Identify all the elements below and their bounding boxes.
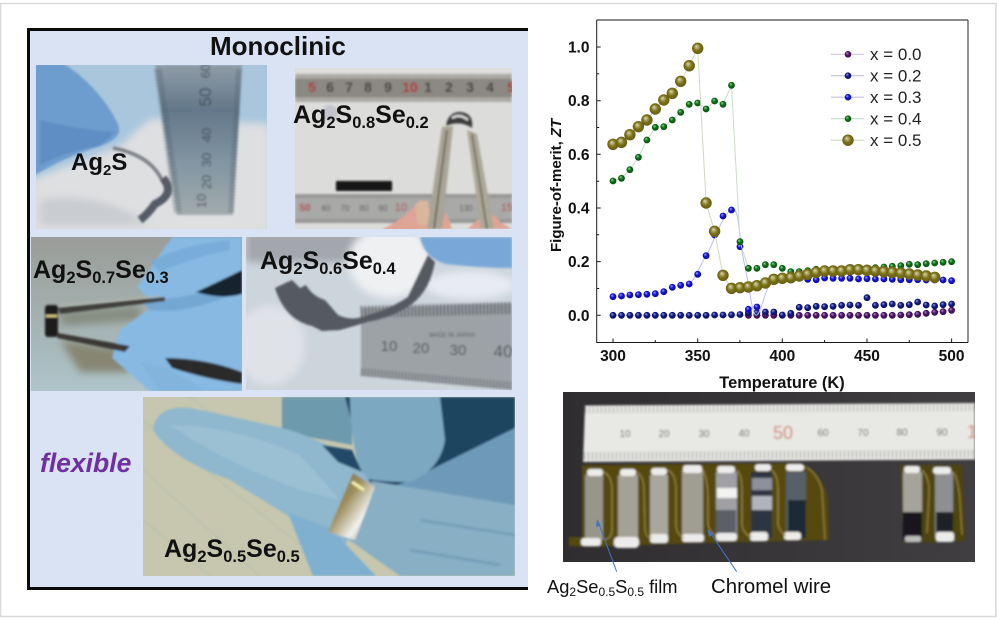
y axis title: Figure-of-merit, ZT [548,117,565,252]
chart: figure of merit ZT vs temperature [548,20,968,392]
legend: x = 0.4 [870,110,922,128]
photo: Ag2S0.8Se0.2 with tweezers: 10 [402,79,418,95]
callout: Chromel wire: Chromel wire [711,576,831,598]
photo: Ag2S0.8Se0.2 with tweezers: 3 [466,79,474,95]
callout: Ag2Se0.5S0.5 film: 2 [569,585,576,599]
callout: Ag2Se0.5S0.5 film: 0.5 [598,585,615,599]
label: Ag2S0.5Se0.5: 2 [197,548,207,566]
photo: Ag2S0.8Se0.2 with tweezers: 70 [341,204,350,213]
label: Ag2S0.5Se0.5: 0.5 [223,548,246,566]
ruler: 40 [738,428,750,440]
photo: Ag2S0.8Se0.2 with tweezers: 10 [395,202,407,214]
x axis tick labels: 500 [939,348,965,365]
label: Ag2S0.8Se0.2: Ag [293,101,326,129]
photo: Ag2S0.8Se0.2 with tweezers: 5 [507,79,515,95]
photo: Ag2S film against ruler: 50 [196,88,215,106]
y axis tick labels: 1.0 [568,40,590,56]
photo: Ag2S0.8Se0.2 with tweezers: 5 [308,79,316,95]
x axis tick labels: 350 [685,348,711,365]
label: flexible: flexible [40,448,131,478]
label: Ag2S0.8Se0.2: Se [375,101,406,129]
x axis title: Temperature (K) [719,374,845,392]
label: Ag2S0.6Se0.4: 2 [293,260,303,278]
y axis tick labels: 0.4 [568,200,590,218]
photo: Ag2S0.8Se0.2 with tweezers: 130 [459,204,473,213]
photo: Ag2S0.8Se0.2 with tweezers: 15 [501,202,513,214]
label: Ag2S0.7Se0.3: Ag [33,256,66,284]
y axis tick labels: 0.8 [568,93,590,110]
photo: Ag2S0.6Se0.4 curved film [246,237,512,390]
photo: Ag2S film against ruler: 40 [199,128,214,142]
photo: Ag2S0.8Se0.2 with tweezers: 1 [424,79,432,95]
photo: Ag2S0.6Se0.4 curved film: MADE IN JAPAN [429,333,475,339]
label: Ag2S0.8Se0.2: 0.8 [352,114,375,132]
photo: Ag2S0.8Se0.2 with tweezers: 50 [299,203,311,214]
photo: Ag2S0.8Se0.2 with tweezers: 7 [345,79,353,95]
ruler: 60 [817,428,829,439]
photo: Ag2S0.8Se0.2 with tweezers: 9 [384,79,392,95]
callout: Ag2Se0.5S0.5 film [547,519,678,599]
ruler: 30 [698,429,710,440]
photo: Ag2S0.8Se0.2 with tweezers: 2 [445,79,453,95]
label: Ag2S0.7Se0.3: S [76,256,92,284]
series: x = 0.4 [610,82,955,275]
ruler: 50 [773,423,793,443]
photo: Ag2S0.8Se0.2 with tweezers: 60 [322,204,331,213]
ruler: 90 [936,428,948,438]
photo: Ag2S0.7Se0.3 in tweezers [31,237,242,391]
film strips [585,470,953,540]
photo: Ag2S film against ruler: 60 [198,64,213,78]
x axis tick labels: 400 [769,348,795,365]
series: x = 0.0 [613,307,955,319]
chromel wires [603,467,962,540]
ruler: 10 [619,429,631,440]
label: Ag2S: 2 [103,162,111,179]
y axis tick labels: 0.0 [568,308,590,325]
photo: Ag2S0.6Se0.4 curved film: 20 [413,340,429,357]
photo: Ag2S0.8Se0.2 with tweezers: 80 [360,204,369,213]
x axis tick labels: 300 [600,348,626,365]
callout: Ag2Se0.5S0.5 film: Ag [547,576,569,597]
y axis tick labels: 0.2 [568,254,590,271]
photo: Ag2S0.6Se0.4 curved film: 30 [450,342,466,359]
legend: x = 0.2 [870,66,922,86]
legend: x = 0.0 [870,45,922,64]
ruler [583,403,987,462]
photo: Ag2S film against ruler: 20 [199,175,214,189]
label: Ag2S0.8Se0.2: 2 [326,114,336,132]
photo: Ag2S film against ruler [30,60,270,235]
series: x = 0.2 [610,294,955,319]
label: Ag2S0.5Se0.5: 0.5 [277,548,300,566]
ruler: 10 [967,422,987,442]
series: x = 0.3 [610,207,955,315]
label: Ag2S0.7Se0.3: 2 [66,269,76,287]
label: Ag2S0.6Se0.4: 0.6 [319,260,342,278]
photo: Ag2S0.8Se0.2 with tweezers [295,68,515,232]
label: Ag2S0.7Se0.3: 0.3 [146,269,169,287]
photo: Ag2S0.8Se0.2 with tweezers: 90 [379,204,388,213]
series: x = 0.5 [607,43,940,294]
label: Ag2S0.8Se0.2: 0.2 [406,114,429,132]
photo: Ag2S0.5Se0.5 ring around gloved finger [143,397,515,576]
label: Ag2S0.5Se0.5: S [207,535,223,563]
ruler: 70 [857,428,869,439]
callout: Ag2Se0.5S0.5 film: film [644,576,678,597]
label: Ag2S0.7Se0.3: 0.7 [92,269,115,287]
callout: Ag2Se0.5S0.5 film: S [615,576,627,597]
photo: Ag2S0.6Se0.4 curved film: 40 [494,342,512,361]
x axis tick labels: 450 [854,348,880,365]
ruler: 80 [896,428,908,438]
label: Ag2S0.6Se0.4: S [303,247,319,275]
white silver paste pads [581,464,954,548]
callout: Chromel wire [708,529,831,598]
label: Ag2S0.6Se0.4: Se [342,247,373,275]
ruler: 20 [658,429,670,440]
label: Ag2S0.8Se0.2: S [336,101,352,129]
y axis tick labels [568,40,590,325]
label: Ag2S0.6Se0.4: Ag [260,247,293,275]
legend: x = 0.3 [870,88,922,107]
photo: Ag2S0.8Se0.2 with tweezers: 4 [486,79,494,95]
label: Ag2S0.6Se0.4: 0.4 [373,260,396,278]
photo: Ag2S0.8Se0.2 with tweezers: 6 [326,79,334,95]
y axis tick labels: 0.6 [568,147,590,164]
label: Ag2S: Ag [71,149,103,176]
label: Ag2S0.7Se0.3: Se [115,256,146,284]
callout: Ag2Se0.5S0.5 film: Se [576,576,598,597]
legend: x = 0.5 [870,131,922,150]
heading: Monoclinic: Monoclinic [210,31,346,61]
photo: Ag2S film against ruler: 30 [199,153,214,167]
photo: Ag2S0.8Se0.2 with tweezers: 8 [364,79,372,95]
axes frame [597,20,968,342]
photo: film thermoelectric modules with ruler [563,392,987,562]
label: Ag2S0.5Se0.5: Ag [164,535,197,563]
legend [831,45,922,150]
x axis tick labels [600,348,965,365]
label: Ag2S0.5Se0.5: Se [246,535,277,563]
photo: Ag2S film against ruler: 10 [194,194,209,208]
photo: Ag2S0.6Se0.4 curved film: 10 [381,338,397,355]
panel: monoclinic flexible samples [28,29,528,589]
label: Ag2S: S [111,149,127,176]
callout: Ag2Se0.5S0.5 film: 0.5 [627,585,644,599]
kapton sheet [569,463,829,547]
